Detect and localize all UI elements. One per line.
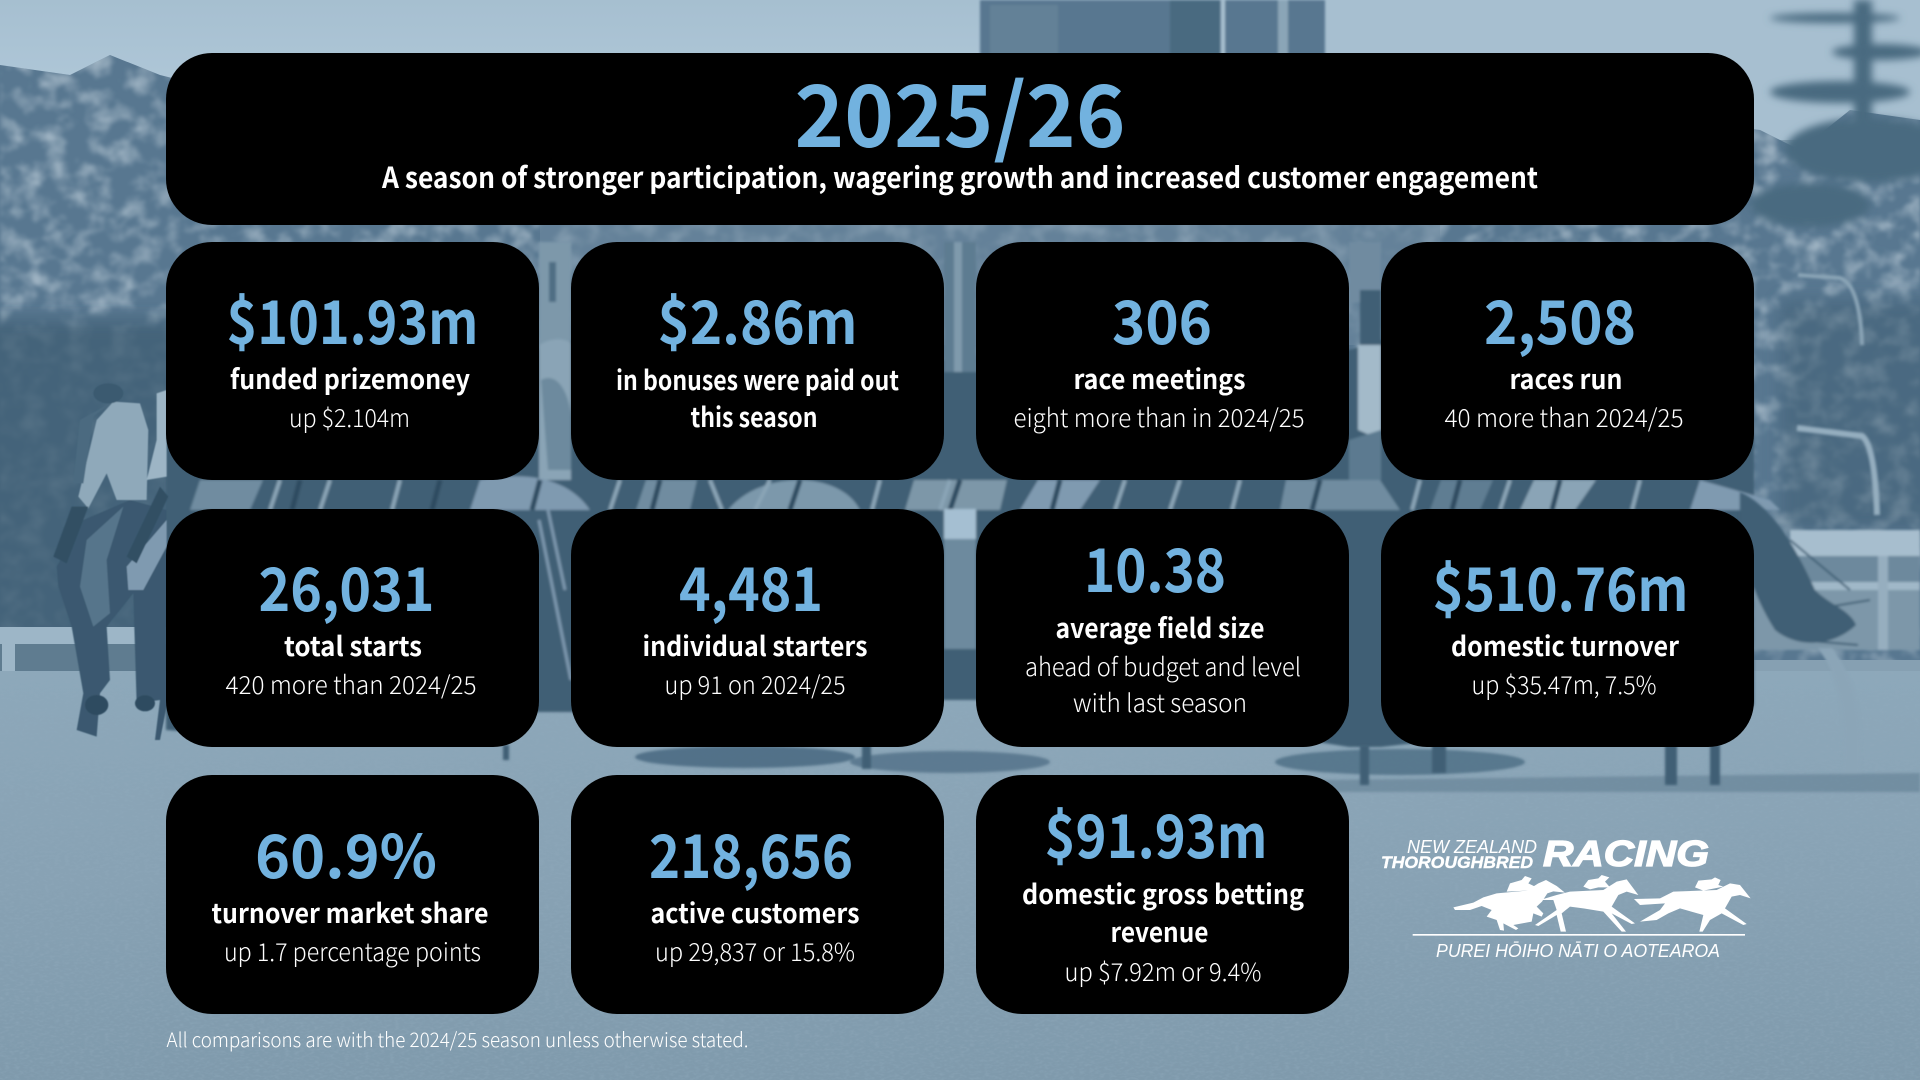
detail: up $2.104m: [289, 399, 410, 435]
label: race meetings: [1074, 358, 1246, 397]
label: races run: [1510, 358, 1622, 397]
panel: domestic turnover: [1381, 509, 1754, 747]
value: 26,031: [258, 542, 434, 629]
background photo: racehorses on track: [0, 0, 1920, 792]
value: 2,508: [1484, 275, 1636, 362]
grass: [0, 671, 1920, 1080]
right fence, lamp posts, tail and running rail: [1320, 275, 1920, 792]
value: 10.38: [1084, 523, 1226, 610]
value: 306: [1112, 275, 1212, 362]
panel: funded prizemoney: [166, 242, 539, 480]
value: $510.76m: [1432, 542, 1688, 629]
label: individual starters: [642, 625, 868, 664]
panel: turnover market share: [166, 775, 539, 1014]
logo: New Zealand Thoroughbred Racing: RACING: [1543, 833, 1709, 874]
detail: 420 more than 2024/25: [226, 666, 476, 702]
detail: ahead of budget and level: [1025, 648, 1301, 684]
footnote: All comparisons are with the 2024/25 season unless otherwise stated.: [166, 1024, 748, 1053]
value: $101.93m: [226, 275, 478, 362]
value: 4,481: [679, 542, 823, 629]
label: active customers: [650, 892, 860, 931]
label: in bonuses were paid out: [616, 359, 899, 398]
value: 60.9%: [255, 809, 437, 896]
label: turnover market share: [212, 892, 488, 931]
detail: 40 more than 2024/25: [1444, 399, 1684, 435]
building: [980, 0, 1325, 60]
value: $91.93m: [1044, 789, 1268, 876]
label: domestic turnover: [1451, 625, 1679, 664]
fence left: [0, 627, 300, 672]
subtitle: A season of stronger participation, wagering growth and increased customer engagement: [381, 155, 1538, 197]
detail line 2: with last season: [1073, 684, 1247, 720]
header panel: [166, 47, 1754, 225]
panel: races run: [1381, 242, 1754, 480]
panel: bonuses: [571, 242, 944, 480]
horses band through the centre: [166, 242, 1780, 747]
pine tree: [1750, 0, 1920, 227]
panel: race meetings: [976, 242, 1349, 480]
panel: total starts: [166, 509, 539, 747]
tree line: [0, 40, 1920, 680]
logo: New Zealand Thoroughbred Racing: THOROUGHBRED: [1381, 853, 1533, 872]
detail: eight more than in 2024/25: [1014, 399, 1304, 435]
logo: New Zealand Thoroughbred Racing: NEW ZEALAND: [1407, 837, 1537, 857]
label line 2: revenue: [1110, 911, 1208, 950]
detail: up $35.47m, 7.5%: [1472, 666, 1656, 702]
value: 218,656: [649, 809, 853, 896]
detail: up 91 on 2024/25: [664, 666, 846, 702]
detail: up 29,837 or 15.8%: [655, 933, 855, 969]
panel: domestic gross betting revenue: [976, 775, 1349, 1014]
panel: individual starters: [571, 509, 944, 747]
detail: up $7.92m or 9.4%: [1064, 953, 1262, 989]
label: average field size: [1056, 607, 1264, 646]
label: funded prizemoney: [230, 358, 470, 397]
logo: New Zealand Thoroughbred Racing: PUREI HŌIHO NĀTI O AOTEAROA: [1436, 941, 1720, 961]
panel: average field size: [976, 509, 1349, 747]
detail: up 1.7 percentage points: [224, 933, 481, 969]
value: $2.86m: [658, 275, 858, 362]
left jockeys and horses: [53, 383, 168, 740]
title: 2025/26: [794, 47, 1126, 172]
logo: New Zealand Thoroughbred Racing: [1381, 833, 1751, 961]
shadows and legs on grass: [503, 745, 1720, 785]
panel: active customers: [571, 775, 944, 1014]
icon: three galloping horses: [1413, 875, 1751, 936]
label: domestic gross betting: [1022, 873, 1304, 912]
label: total starts: [284, 625, 422, 664]
label line 2: this season: [690, 396, 818, 435]
